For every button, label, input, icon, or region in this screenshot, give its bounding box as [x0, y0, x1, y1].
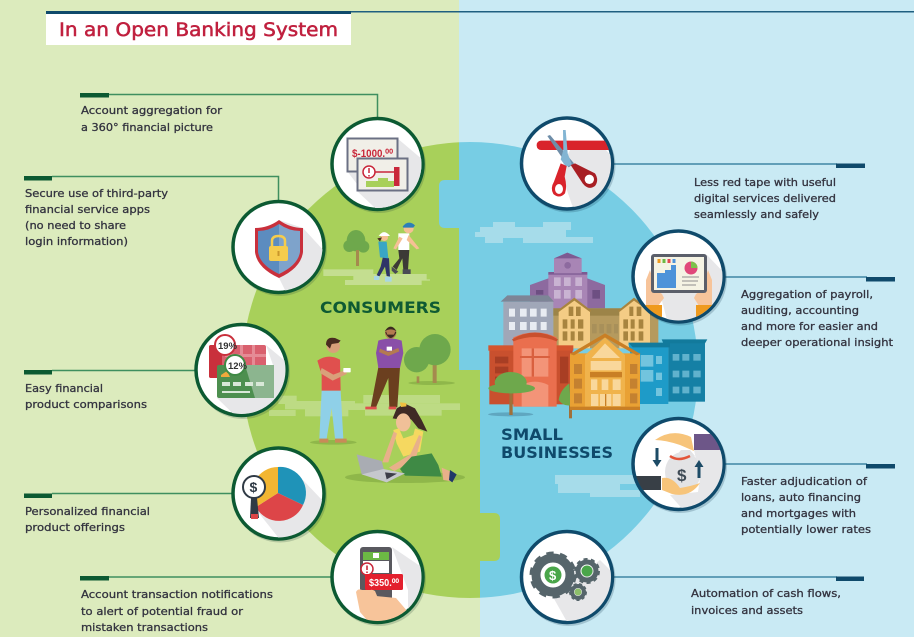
second tree	[559, 383, 572, 418]
heading: consumers: CONSUMERS	[320, 298, 441, 317]
text: personalized offerings	[25, 505, 150, 534]
text: account aggregation	[81, 104, 222, 134]
text: loan adjudication	[741, 475, 871, 536]
scene: standing people and trees	[310, 327, 455, 445]
text: transaction notifications: mistaken transactions	[81, 621, 208, 634]
text: automation: invoices and assets	[691, 604, 803, 617]
puzzle tab: blue into green	[439, 180, 460, 228]
connector: third-party apps	[24, 176, 278, 201]
connector: loan adjudication	[725, 464, 895, 468]
puzzle tab: green into blue	[479, 513, 500, 561]
title	[46, 14, 351, 45]
text: third-party apps: financial service apps	[25, 203, 150, 216]
scene: woman with laptop	[345, 402, 465, 483]
connector: account aggregation	[80, 93, 378, 118]
text: loan adjudication: and mortgages with	[741, 507, 856, 520]
text: transaction notifications: Account transaction notifications	[81, 588, 273, 601]
text: payroll aggregation: Aggregation of payroll,	[741, 288, 873, 301]
background: small businesses side	[459, 0, 914, 637]
icon: account windows: $-1000.⁰⁰	[352, 148, 394, 160]
icon: tablet dashboard	[631, 229, 727, 326]
icon: money exchange	[631, 416, 727, 513]
icon: money exchange: $	[677, 466, 687, 485]
scene: city buildings	[488, 253, 707, 418]
top rule	[46, 11, 914, 14]
grey building	[501, 295, 554, 348]
central circle: consumers half	[247, 142, 480, 598]
text: payroll aggregation: and more for easier and	[741, 320, 878, 333]
text: comparisons: Easy financial	[25, 382, 103, 395]
orange building	[570, 333, 641, 410]
connector: payroll aggregation	[725, 277, 895, 282]
icon: scissors cutting red tape	[520, 116, 616, 212]
text: automation: Automation of cash flows,	[691, 587, 841, 600]
text: red tape: seamlessly and safely	[694, 208, 820, 221]
text: transaction notifications: to alert of potential fraud or	[81, 605, 243, 618]
icon: pie chart with magnifier	[231, 446, 327, 542]
connector: transaction notifications	[80, 576, 331, 580]
heading: small businesses: BUSINESSES	[501, 443, 613, 462]
connector: automation	[614, 576, 864, 581]
heading: small businesses: SMALL	[501, 425, 563, 444]
text: loan adjudication: Faster adjudication of	[741, 475, 868, 488]
text: red tape: digital services delivered	[694, 192, 836, 205]
icon: credit card comparison: 19%	[218, 341, 238, 352]
title: In an Open Banking System	[59, 19, 338, 41]
text: payroll aggregation: deeper operational insight	[741, 336, 894, 349]
text: loan adjudication: potentially lower rates	[741, 523, 871, 536]
text: comparisons	[25, 382, 147, 411]
text: payroll aggregation: auditing, accounting	[741, 304, 859, 317]
text: personalized offerings: Personalized financial	[25, 505, 150, 518]
icon: credit card comparison: 12%	[228, 361, 248, 372]
icon: credit card comparison	[194, 322, 290, 419]
text: payroll aggregation	[741, 288, 894, 349]
text: red tape	[694, 176, 836, 221]
scene: skaters and tree	[323, 223, 430, 285]
text: account aggregation: a 360° financial picture	[81, 121, 213, 134]
text: loan adjudication: loans, auto financing	[741, 491, 861, 504]
connector: red tape	[614, 164, 865, 168]
tan building	[553, 298, 658, 348]
connector: personalized offerings	[24, 494, 232, 498]
background: consumers side	[0, 0, 480, 637]
connector: comparisons	[24, 370, 195, 374]
purple building	[530, 253, 605, 308]
text: comparisons: product comparisons	[25, 398, 147, 411]
central circle: businesses half	[459, 142, 696, 598]
icon: phone alert: $350.⁰⁰	[369, 578, 399, 589]
text: red tape: Less red tape with useful	[694, 176, 836, 189]
front tree	[488, 372, 535, 415]
blue buildings	[628, 339, 707, 404]
icon: gears	[520, 530, 616, 626]
text: account aggregation: Account aggregation for	[81, 104, 222, 117]
text: personalized offerings: product offerings	[25, 521, 125, 534]
heading: small businesses	[501, 425, 613, 462]
text: third-party apps	[25, 187, 169, 248]
text: third-party apps: (no need to share	[25, 219, 126, 232]
icon: security shield	[231, 200, 327, 296]
text: transaction notifications	[81, 588, 273, 634]
icon: account windows	[330, 116, 426, 213]
text: third-party apps: login information)	[25, 235, 128, 248]
text: third-party apps: Secure use of third-party	[25, 187, 169, 200]
red building	[488, 332, 573, 407]
icon: phone alert	[330, 530, 426, 626]
icon: pie chart with magnifier: $	[250, 479, 258, 495]
icon: gears: $	[549, 568, 557, 583]
ground paths and clouds	[269, 222, 640, 497]
text: automation	[691, 587, 841, 617]
